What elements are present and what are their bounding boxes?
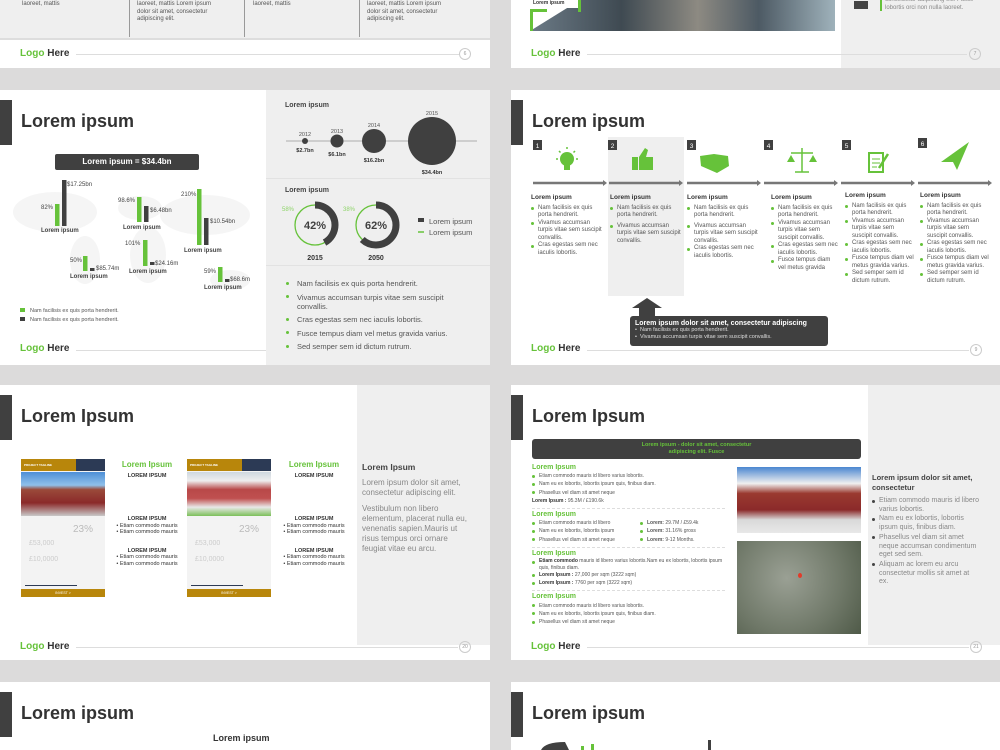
slide: top-right partial: [511, 0, 1000, 68]
card 2 text: • Etiam commodo mauris: [283, 554, 345, 560]
bubble timeline: Lorem ipsum: [429, 217, 472, 226]
page number: [970, 641, 982, 653]
card 2 text: LOREM IPSUM: [295, 548, 333, 554]
title: Lorem ipsum: [21, 111, 134, 131]
card 1 text: LOREM IPSUM: [128, 516, 166, 522]
side text: Lorem Ipsum: [362, 462, 415, 472]
card 2: £53,000: [195, 540, 220, 547]
step 6 text: Vivamus accumsan turpis vitae sem suscipit convallis.: [927, 218, 979, 238]
step icons and arrows: [533, 138, 992, 186]
page number: [459, 48, 471, 60]
page number: [459, 641, 471, 653]
card 1: £53,000: [29, 540, 54, 547]
step 6 text: [920, 192, 989, 284]
text column 2: [137, 0, 211, 22]
bullet list: [286, 279, 447, 351]
side text: [872, 473, 979, 585]
page number: 20: [462, 644, 468, 650]
side text: Nam eu ex lobortis, lobortis ipsum quis, finibus diam.: [879, 515, 964, 531]
footer logo: Logo Here: [20, 48, 69, 59]
step icons and arrows: 6: [921, 141, 925, 148]
detail sections: Lorem Ipsum: [532, 593, 576, 600]
step 4 text: [771, 194, 838, 270]
slide: bottom-right partial: [511, 682, 1000, 750]
world map bar chart: 59%: [204, 269, 217, 275]
step 1 text: Lorem ipsum: [531, 194, 572, 201]
step 6 text: Lorem ipsum: [920, 192, 961, 199]
page number: 9: [975, 347, 977, 353]
slide: top-left partial: [0, 0, 490, 68]
detail sections: Lorem Ipsum: [532, 550, 576, 557]
text column 2: laoreet, mattis Lorem ipsum: [137, 1, 211, 7]
footer logo: Logo Here: [20, 641, 69, 652]
right gray panel: [266, 90, 490, 365]
card 1: [21, 459, 105, 597]
card 2: PROJECT TAGLINE: [190, 463, 218, 467]
side text: Etiam commodo mauris id libero varius lobortis.: [879, 497, 979, 513]
right gray panel: [357, 385, 490, 645]
header bar: Lorem ipsum - dolor sit amet, consectetur: [642, 442, 751, 448]
text column 4: laoreet, mattis Lorem ipsum: [367, 1, 441, 7]
card 1 text: • Etiam commodo mauris: [116, 522, 178, 528]
bubble timeline: 42%: [304, 220, 326, 232]
world map bar chart: Lorem ipsum: [123, 225, 161, 231]
header bar: [532, 439, 861, 459]
footer logo: Logo Here: [531, 641, 580, 652]
card 1: £10,0000: [29, 556, 58, 563]
step 3 text: Lorem ipsum: [687, 194, 728, 201]
building photo: [737, 467, 861, 533]
world map bar chart: 101%: [125, 241, 141, 247]
detail sections: Etiam commodo mauris id libero varius lobortis.: [539, 473, 644, 479]
card 2: [187, 459, 271, 597]
bubble timeline: 2015: [307, 255, 323, 262]
step 4 text: Lorem ipsum: [771, 194, 812, 201]
bubble timeline: 2013: [331, 129, 343, 135]
step 5 text: Cras egestas sem nec iaculis lobortis.: [852, 240, 912, 254]
card 1 text: • Etiam commodo mauris: [116, 554, 178, 560]
card 1 text: • Etiam commodo mauris: [116, 529, 178, 535]
card 1 text: LOREM IPSUM: [128, 548, 166, 554]
card 1: PROJECT TAGLINE: [24, 463, 52, 467]
step 5 text: Fusce tempus diam vel metus gravida varius.: [852, 255, 914, 268]
total pill: [55, 154, 199, 170]
slide: bottom-left partial: [0, 682, 490, 750]
detail sections: Lorem Ipsum: [532, 511, 576, 518]
step 4 text: Fusce tempus diam vel metus gravida: [778, 257, 830, 270]
page number: 6: [464, 51, 466, 57]
detail sections: Nam eu ex lobortis, lobortis ipsum quis, finibus diam.: [539, 481, 656, 487]
world map bar chart: 50%: [70, 258, 83, 264]
bubble timeline: 38%: [343, 207, 356, 213]
step 5 text: Sed semper sem id dictum rutrum.: [852, 270, 904, 284]
world map bar chart: Lorem ipsum: [41, 228, 79, 234]
right gray panel: [868, 385, 1000, 645]
card 2 text: LOREM IPSUM: [295, 516, 333, 522]
world map bar chart: 98.6%: [118, 198, 136, 204]
legend: Nam facilisis ex quis porta hendrerit.: [30, 308, 119, 314]
detail sections: Etiam commodo mauris id libero varius lobortis.: [539, 603, 644, 609]
footer logo: Logo Here: [20, 343, 69, 354]
slide: top-right partial: lobortis orci non nulla laoreet.: [885, 4, 963, 10]
bubble timeline: Lorem ipsum: [285, 187, 329, 194]
text column 2: adipiscing elit.: [137, 16, 175, 22]
text column 4: [367, 0, 441, 22]
total pill: Lorem ipsum = $34.4bn: [82, 157, 172, 166]
bubble timeline: 2012: [299, 132, 311, 138]
world map bar chart: $68.6m: [230, 277, 250, 283]
world map bar chart: $24.16m: [155, 261, 178, 267]
step 4 text: Nam facilisis ex quis porta hendrerit.: [778, 204, 832, 218]
side text: Lorem ipsum dolor sit amet, consectetur adipiscing elit.: [362, 478, 461, 497]
title: Lorem ipsum: [532, 111, 645, 131]
green bracket label: Lorem ipsum: [533, 0, 564, 6]
title: Lorem ipsum: [532, 703, 645, 723]
detail sections: Lorem: 29.7M / £59.4k: [647, 520, 698, 526]
footer logo: Logo Here: [531, 48, 580, 59]
detail sections: Lorem Ipsum : 95.3M / £190.6k: [532, 498, 604, 504]
card 1: INVEST >: [55, 591, 71, 595]
page number: [969, 48, 981, 60]
card 2 text: Lorem Ipsum: [289, 460, 339, 469]
detail sections: Etiam commodo mauris id libero: [539, 520, 610, 526]
step 2 text: Vivamus accumsan turpis vitae sem suscipit convallis.: [617, 222, 681, 244]
bullet list: Sed semper sem id dictum rutrum.: [297, 342, 412, 351]
world map bar chart: Lorem ipsum: [184, 248, 222, 254]
legend: [20, 308, 119, 323]
highlight column: [608, 137, 684, 296]
side text: [362, 462, 467, 553]
bubble timeline: [282, 102, 477, 262]
step 4 text: Cras egestas sem nec iaculis lobortis.: [778, 242, 838, 256]
card 1: 23%: [73, 524, 93, 535]
step icons and arrows: 4: [767, 143, 771, 150]
card 1 text: [116, 460, 178, 566]
icon: partial shapes: [541, 740, 711, 750]
icon: chart: [854, 1, 868, 9]
green bracket label: [531, 0, 579, 8]
bubble timeline: 62%: [365, 220, 387, 232]
bullet list: Fusce tempus diam vel metus gravida varius.: [297, 328, 447, 338]
side text: Aliquam ac lorem eu arcu consectetur mollis sit amet at ex.: [879, 561, 969, 585]
card 2 text: LOREM IPSUM: [295, 472, 333, 478]
step 3 text: Cras egestas sem nec iaculis lobortis.: [694, 245, 754, 258]
title: Lorem Ipsum: [532, 406, 645, 426]
slide: project cards: [0, 385, 490, 660]
bubble timeline: 2050: [368, 255, 384, 262]
gray side panel: [841, 0, 1000, 68]
side text: Lorem ipsum dolor sit amet, consectetur: [872, 473, 972, 492]
card 2: £10,0000: [195, 556, 224, 563]
world map bar chart: 82%: [41, 205, 54, 211]
detail sections: Lorem: 9-12 Months.: [647, 537, 695, 543]
step 1 text: [531, 194, 602, 256]
world map bar chart: [13, 180, 250, 291]
detail sections: Lorem Ipsum: [532, 464, 576, 471]
step 5 text: [845, 192, 914, 284]
bubble timeline: $6.1bn: [328, 152, 346, 158]
callout: • Vivamus accumsan turpis vitae sem suscipit convallis.: [635, 334, 772, 340]
bubble timeline: $16.2bn: [364, 158, 385, 164]
world map bar chart: $17.25bn: [67, 182, 92, 188]
detail sections: Lorem: 31.16% gross: [647, 528, 696, 534]
title: Lorem ipsum: [21, 703, 134, 723]
world map bar chart: 210%: [181, 192, 197, 198]
card 2 text: • Etiam commodo mauris: [283, 522, 345, 528]
side text: Phasellus vel diam sit amet neque accumsan condimentum eget sed sem.: [879, 534, 976, 558]
world map bar chart: Lorem ipsum: [70, 274, 108, 280]
step 1 text: Vivamus accumsan turpis vitae sem suscipit convallis.: [538, 220, 602, 240]
step 6 text: Sed semper sem id dictum rutrum.: [927, 270, 979, 284]
card 2 text: • Etiam commodo mauris: [283, 560, 345, 566]
step 3 text: [687, 194, 758, 258]
bullet list: Nam facilisis ex quis porta hendrerit.: [297, 279, 418, 288]
side text: Vestibulum non libero elementum, placerat nulla eu, venenatis sapien.Mauris ut risus tempus orci ornare feugiat vitae eu arcu.: [362, 504, 467, 553]
gray text panel: [0, 0, 490, 40]
bubble timeline: 2014: [368, 123, 380, 129]
legend: Nam facilisis ex quis porta hendrerit.: [30, 317, 119, 323]
world map bar chart: $85.74m: [96, 266, 119, 272]
text column 1: laoreet, mattis: [22, 1, 60, 7]
card 1 text: LOREM IPSUM: [128, 472, 166, 478]
detail sections: Phasellus vel diam sit amet neque: [539, 490, 615, 496]
detail sections: Nam eu ex lobortis, lobortis ipsum: [539, 528, 614, 534]
step 6 text: Fusce tempus diam vel metus gravida varius.: [927, 255, 989, 268]
bullet list: Vivamus accumsan turpis vitae sem suscipit convallis.: [297, 292, 444, 310]
world map bar chart: $10.54bn: [210, 219, 235, 225]
detail sections: Nam eu ex lobortis, lobortis ipsum quis, finibus diam.: [539, 611, 656, 617]
step 6 text: Cras egestas sem nec iaculis lobortis.: [927, 240, 987, 254]
detail sections: Phasellus vel diam sit amet neque: [539, 537, 615, 543]
donut 2050: [356, 205, 396, 245]
bubble timeline: Lorem ipsum: [429, 228, 472, 237]
callout: Lorem ipsum dolor sit amet, consectetur adipiscing: [635, 320, 807, 327]
map photo: [737, 541, 861, 634]
page number: 21: [973, 644, 979, 650]
title: Lorem Ipsum: [21, 406, 134, 426]
card 2 text: [283, 460, 345, 566]
detail sections: Lorem Ipsum : 7760 per sqm (3222 sqm): [539, 580, 632, 586]
detail sections: [532, 464, 725, 625]
callout: • Nam facilisis ex quis porta hendrerit.: [635, 327, 729, 333]
step 4 text: Vivamus accumsan turpis vitae sem suscipit convallis.: [778, 220, 830, 240]
world map bar chart: $6.48bn: [150, 208, 172, 214]
bubble timeline: 58%: [282, 207, 295, 213]
step icons and arrows: 2: [611, 143, 615, 150]
text column 4: dolor sit amet, consectetur: [367, 8, 437, 14]
detail sections: Phasellus vel diam sit amet neque: [539, 619, 615, 625]
step 3 text: Nam facilisis ex quis porta hendrerit.: [694, 204, 748, 218]
detail sections: Etiam commodo mauris id libero varius lobortis.Nam eu ex lobortis, lobortis ipsum quis, finibus diam.: [539, 558, 722, 571]
card 1 text: • Etiam commodo mauris: [116, 560, 178, 566]
subheading: Lorem ipsum: [213, 733, 270, 743]
card 1 text: Lorem Ipsum: [122, 460, 172, 469]
arrow: up: [632, 298, 662, 316]
footer logo: Logo Here: [531, 343, 580, 354]
donut 2015: [295, 205, 335, 245]
page number: 7: [974, 51, 976, 57]
step 2 text: Lorem ipsum: [610, 194, 651, 201]
step icons and arrows: 3: [690, 143, 694, 150]
step icons and arrows: 1: [536, 143, 540, 150]
page number: [970, 344, 982, 356]
world map bar chart: Lorem ipsum: [204, 285, 242, 291]
card 2: 23%: [239, 524, 259, 535]
world map bar chart: Lorem ipsum: [129, 269, 167, 275]
text column 3: laoreet, mattis: [253, 1, 291, 7]
step 1 text: Nam facilisis ex quis porta hendrerit.: [538, 204, 592, 218]
city photo: [530, 0, 835, 31]
side text: [880, 0, 882, 11]
bubble timeline: $34.4bn: [422, 170, 443, 176]
step 1 text: Cras egestas sem nec iaculis lobortis.: [538, 242, 598, 256]
step 2 text: Nam facilisis ex quis porta hendrerit.: [617, 204, 671, 218]
callout: [630, 316, 828, 346]
step 5 text: Vivamus accumsan turpis vitae sem suscipit convallis.: [852, 218, 904, 238]
text column 2: dolor sit amet, consectetur: [137, 8, 207, 14]
bubble timeline: $2.7bn: [296, 148, 314, 154]
step 5 text: Nam facilisis ex quis porta hendrerit.: [852, 202, 906, 216]
slide: market map and growth: [0, 90, 490, 365]
bubble timeline: 2015: [426, 111, 438, 117]
step 5 text: Lorem ipsum: [845, 192, 886, 199]
slide: six step process: [511, 90, 1000, 365]
detail sections: Lorem Ipsum : 27,000 per sqm (3222 sqm): [539, 572, 636, 578]
step icons and arrows: 5: [845, 143, 849, 150]
slide: property details: [511, 385, 1000, 660]
card 2: INVEST >: [221, 591, 237, 595]
bubble timeline: Lorem ipsum: [285, 102, 329, 109]
card 2 text: • Etiam commodo mauris: [283, 529, 345, 535]
step 2 text: [610, 194, 681, 244]
step 6 text: Nam facilisis ex quis porta hendrerit.: [927, 202, 981, 216]
header bar: adipiscing elit. Fusce: [669, 449, 724, 455]
step 3 text: Vivamus accumsan turpis vitae sem suscipit convallis.: [694, 222, 758, 244]
bullet list: Cras egestas sem nec iaculis lobortis.: [297, 315, 423, 324]
text column 4: adipiscing elit.: [367, 16, 405, 22]
